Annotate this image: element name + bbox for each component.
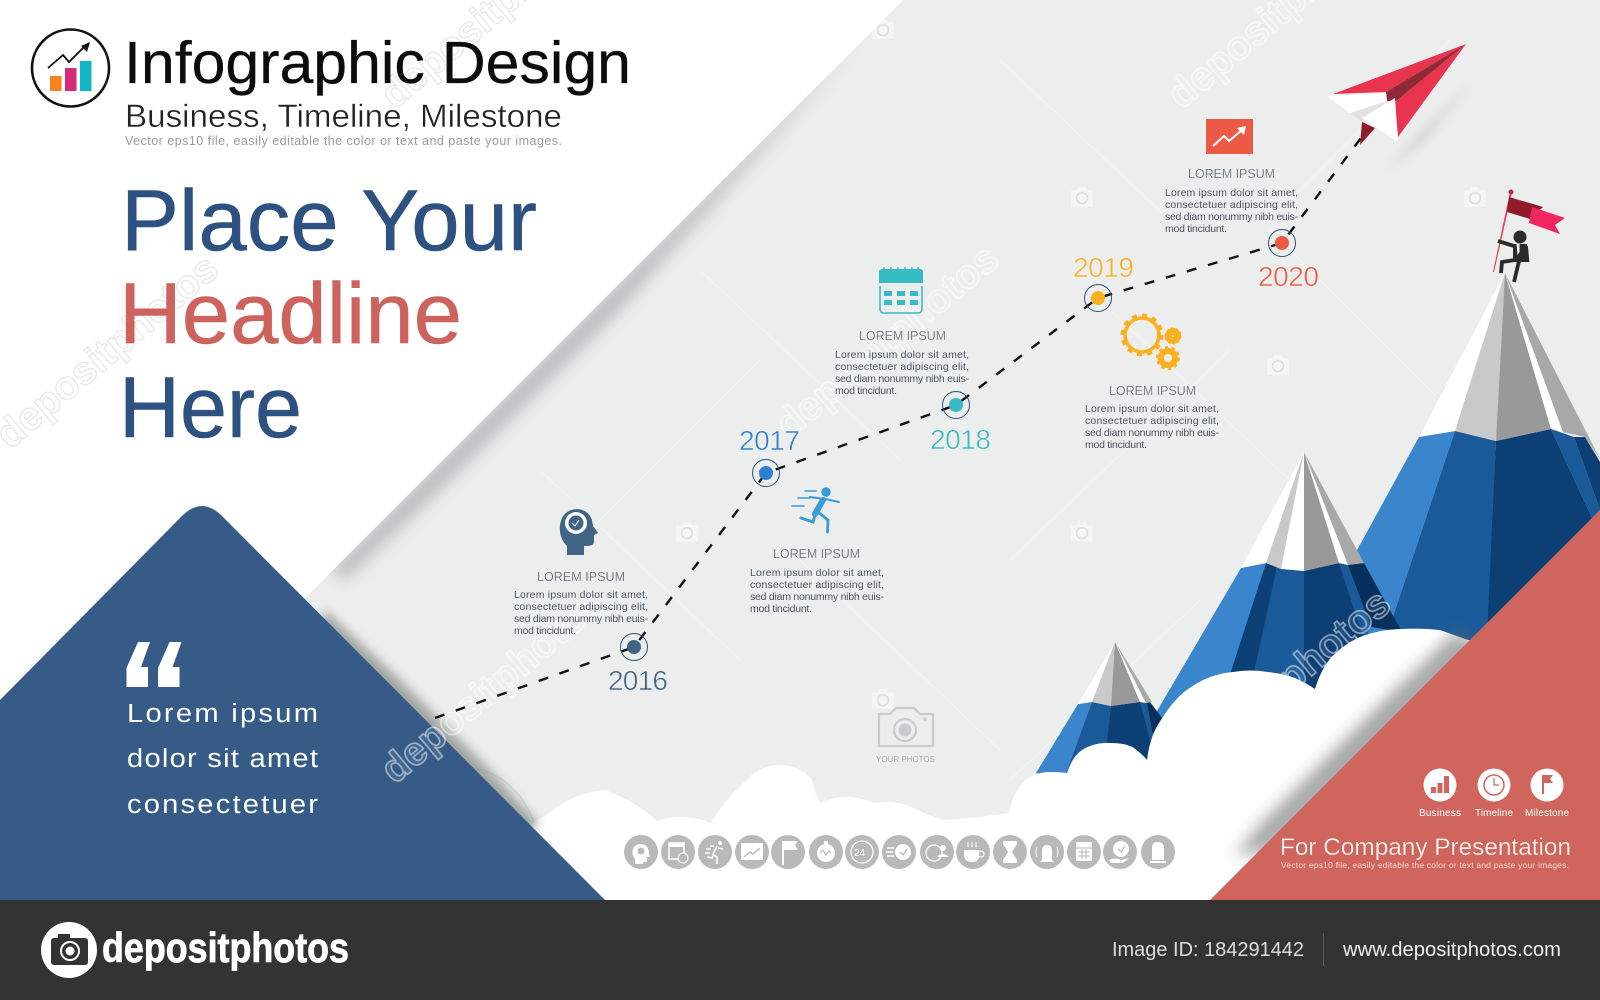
milestone node 2020: 2020 xyxy=(1258,261,1319,292)
panel: grey timeline background xyxy=(300,0,1600,900)
logo mark xyxy=(32,30,109,106)
panel: red presentation corner xyxy=(1210,510,1600,900)
milestone node 2017 xyxy=(739,425,800,486)
small icon: milestone stone xyxy=(1141,835,1175,869)
text block 2019 xyxy=(1085,384,1220,451)
icon: calendar xyxy=(879,267,923,313)
small icon: head xyxy=(624,835,658,869)
text block 2020: consectetuer adipiscing elit, xyxy=(1165,199,1298,211)
footer bar xyxy=(0,900,1600,1000)
diagonal watermark text: depositphotos xyxy=(768,236,1007,447)
text block 2016: mod tincidunt. xyxy=(514,625,576,637)
presentation heading: For Company Presentation xyxy=(1280,834,1571,861)
icon: gears xyxy=(1122,316,1180,368)
text block 2019: consectetuer adipiscing elit, xyxy=(1085,415,1219,427)
title: Infographic Design xyxy=(124,30,631,96)
small icon: runner xyxy=(698,835,732,869)
faint watermark text on white xyxy=(0,0,612,457)
clouds: white paper cut-out xyxy=(522,629,1600,900)
small icon: chart frame xyxy=(735,835,769,869)
photo placeholder: YOUR PHOTOS xyxy=(876,755,935,764)
timeline dashed path xyxy=(435,130,1367,718)
small icon: flag xyxy=(771,835,805,869)
faint cloud outline near blue panel xyxy=(470,768,534,823)
text block 2018 xyxy=(835,329,970,397)
icon: footer camera logo xyxy=(41,922,97,978)
milestone node 2018: 2018 xyxy=(930,424,991,455)
icon: business chart badge xyxy=(1424,768,1456,802)
headline: Here xyxy=(119,360,302,456)
subtitle note: Vector eps10 file, easily editable the color or text and paste your images. xyxy=(125,134,562,148)
text block 2016: Lorem ipsum dolor sit amet, xyxy=(514,589,648,601)
text block 2016: consectetuer adipiscing elit, xyxy=(514,601,648,613)
icon: milestone flag badge xyxy=(1530,768,1564,802)
quote text: Lorem ipsum xyxy=(127,698,318,728)
diagonal watermark text: depositphotos xyxy=(373,581,612,792)
panel: blue quote triangle xyxy=(0,506,605,900)
text block 2017: LOREM IPSUM xyxy=(773,547,860,561)
label: Business: Business xyxy=(1419,808,1461,819)
milestone node 2018 xyxy=(930,392,991,455)
small icon: person clock xyxy=(920,835,954,869)
milestone node 2020 xyxy=(1258,230,1319,292)
footer brand name: depositphotos xyxy=(102,924,349,971)
small icon: calendar grid xyxy=(1067,835,1101,869)
small icon: 24 hours xyxy=(845,835,879,869)
text block 2020: mod tincidunt. xyxy=(1165,223,1227,235)
headline xyxy=(119,173,537,456)
text block 2020: Lorem ipsum dolor sit amet, xyxy=(1165,187,1298,199)
image id: Image ID: 184291442 xyxy=(1112,939,1304,961)
background watermark lattice and camera marks xyxy=(479,19,1600,780)
website: www.depositphotos.com xyxy=(1342,939,1561,961)
text block 2017 xyxy=(750,547,884,615)
text block 2016 xyxy=(514,570,648,637)
small icon: hourglass xyxy=(993,835,1027,869)
icon row: grey circular icons xyxy=(624,835,1175,869)
label: Milestone: Milestone xyxy=(1525,808,1569,819)
icon: rising chart square xyxy=(1206,119,1253,154)
text block 2019: LOREM IPSUM xyxy=(1109,384,1196,398)
quote text: consectetuer xyxy=(127,789,318,819)
icon: quotation marks xyxy=(126,642,182,687)
photo placeholder xyxy=(876,708,935,764)
small icon: stopwatch xyxy=(809,835,843,869)
headline: Headline xyxy=(119,266,462,362)
small icon: bell xyxy=(1030,835,1064,869)
small icon: speed check xyxy=(882,835,916,869)
icon: runner xyxy=(792,487,839,532)
white corner shadow xyxy=(330,40,860,580)
text block 2020 xyxy=(1165,167,1298,235)
text block 2017: Lorem ipsum dolor sit amet, xyxy=(750,567,884,579)
milestone node 2019: 2019 xyxy=(1073,252,1134,283)
text block 2018: Lorem ipsum dolor sit amet, xyxy=(835,349,969,361)
plane shadow xyxy=(1385,80,1474,170)
text block 2016: LOREM IPSUM xyxy=(537,570,625,584)
white corner panel xyxy=(0,0,903,603)
text block 2016: sed diam nonummy nibh euis- xyxy=(514,613,648,625)
small icon: 24 hours: 24 xyxy=(854,848,866,859)
text block 2020: LOREM IPSUM xyxy=(1188,167,1275,181)
label: Timeline: Timeline xyxy=(1475,808,1513,819)
headline: Place Your xyxy=(121,173,537,269)
mountain: middle peak xyxy=(1140,452,1402,740)
icon: timeline clock badge xyxy=(1478,768,1510,802)
mountain: small peak xyxy=(1036,642,1162,785)
red panel shadow xyxy=(1235,632,1482,855)
icon: head with clock xyxy=(560,509,598,555)
text block 2017: sed diam nonummy nibh euis- xyxy=(750,591,884,603)
milestone node 2019 xyxy=(1073,252,1134,312)
text block 2017: mod tincidunt. xyxy=(750,603,812,615)
text block 2019: mod tincidunt. xyxy=(1085,439,1147,451)
text block 2020: sed diam nonummy nibh euis- xyxy=(1165,211,1298,223)
paper plane xyxy=(1327,44,1466,145)
milestone node 2017: 2017 xyxy=(739,425,800,456)
subtitle: Business, Timeline, Milestone xyxy=(125,98,562,134)
text block 2018: consectetuer adipiscing elit, xyxy=(835,361,969,373)
mountain: large peak with flag xyxy=(1275,273,1600,700)
diagonal watermark text: depositphotos xyxy=(1160,581,1399,792)
climber with flag xyxy=(1493,190,1565,282)
text block 2018: LOREM IPSUM xyxy=(859,329,946,343)
quote text: dolor sit amet xyxy=(127,743,318,773)
text block 2019: sed diam nonummy nibh euis- xyxy=(1085,427,1220,439)
text block 2019: Lorem ipsum dolor sit amet, xyxy=(1085,403,1219,415)
small icon: clock in hand xyxy=(1103,835,1137,869)
milestone node 2016: 2016 xyxy=(608,665,668,696)
quote text xyxy=(127,698,318,819)
small icon: coffee cup xyxy=(956,835,990,869)
presentation sub text: Vector eps10 file, easily editable the color or text and paste your images. xyxy=(1281,860,1569,870)
milestone node 2016 xyxy=(608,634,668,696)
blue panel shadow xyxy=(320,610,540,835)
text block 2018: sed diam nonummy nibh euis- xyxy=(835,373,970,385)
small icon: calendar clock xyxy=(661,835,695,869)
text block 2018: mod tincidunt. xyxy=(835,385,897,397)
text block 2017: consectetuer adipiscing elit, xyxy=(750,579,884,591)
diagonal watermark text xyxy=(373,0,1399,792)
